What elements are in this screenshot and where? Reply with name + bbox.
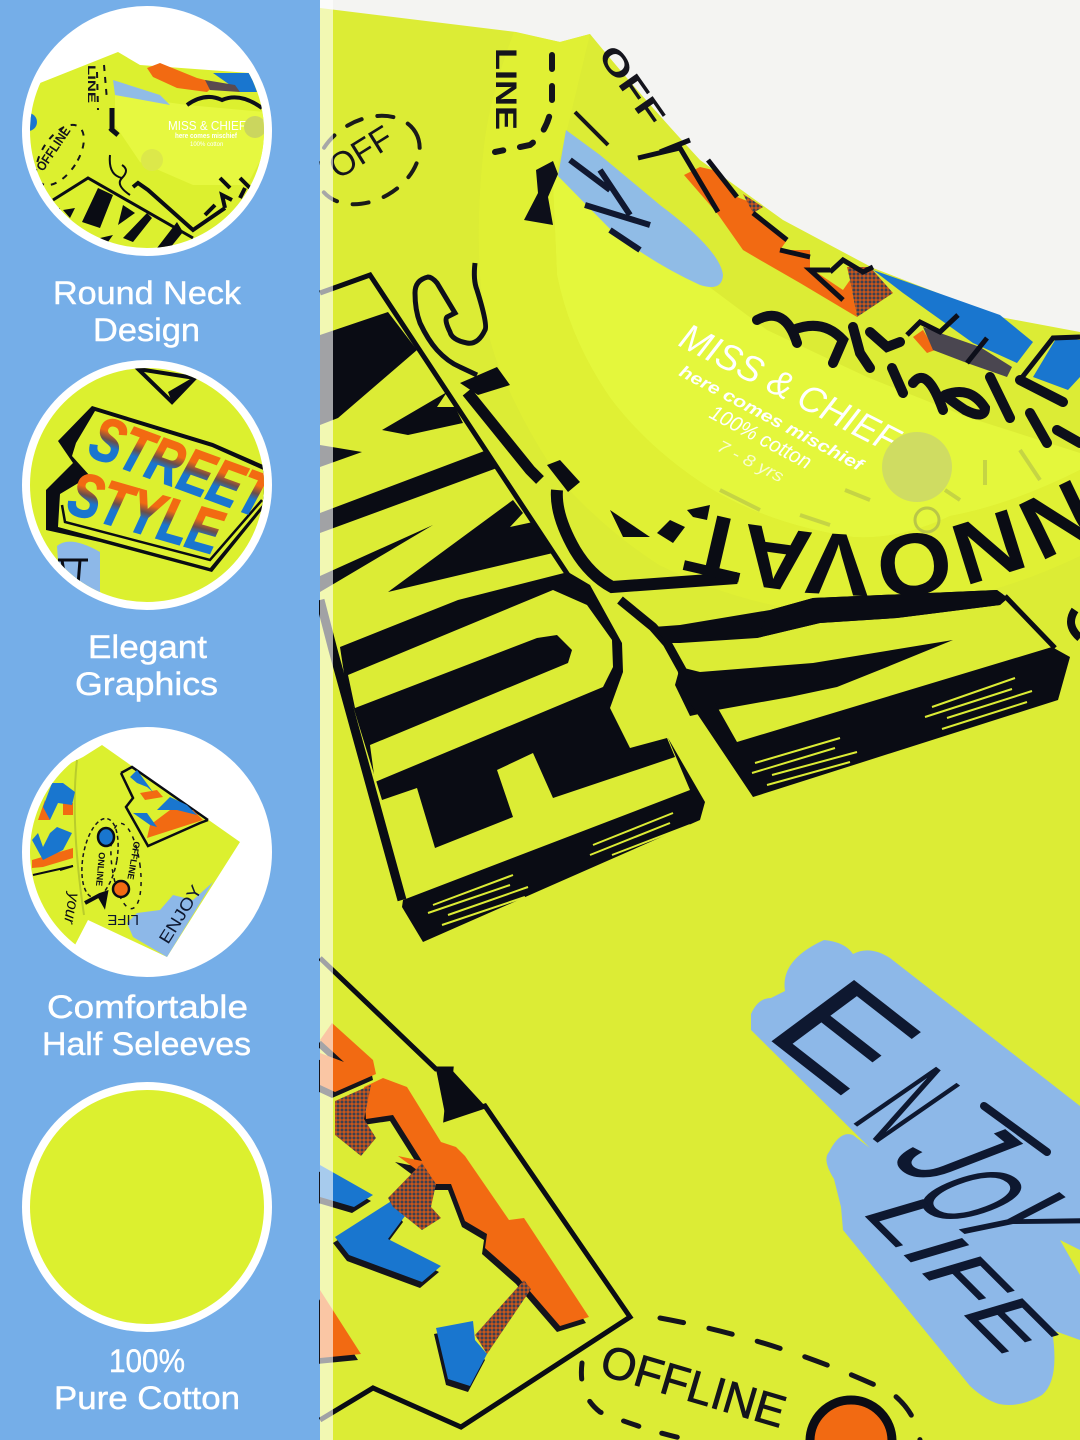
label: Round Neck Design: Round Neck [53, 275, 242, 311]
feature 1: round neck: LINE [85, 65, 97, 103]
show-through circle on inner neck [720, 432, 1040, 532]
inner neck label: brand text: MISS & CHIEF [673, 316, 908, 462]
OFFLINE tag [581, 1318, 920, 1440]
ENJOY LIFE paint blob: E [735, 953, 954, 1119]
ENJOY LIFE paint blob: O [880, 1152, 1063, 1239]
ENJOY LIFE paint blob [735, 940, 1080, 1405]
shirt body [320, 8, 1080, 1440]
shadows [317, 1029, 586, 1364]
back collar print [558, 130, 1080, 443]
ENJOY LIFE paint blob: N [824, 1046, 989, 1164]
collar print: LINE and OFF: OFF [591, 38, 672, 133]
collar print: LINE and OFF: LINE [489, 48, 522, 130]
feature 4: pure cotton swatch [22, 1082, 272, 1332]
feature 3: half sleeves [15, 727, 272, 977]
FUNK block print [320, 275, 705, 942]
OFFLINE tag: OFFLINE [595, 1335, 792, 1438]
label: Round Neck Design: Design [93, 312, 200, 348]
left feature column [0, 0, 319, 1440]
left street graphic [32, 800, 73, 868]
orange letters [320, 1023, 589, 1358]
label: Elegant Graphics [75, 629, 218, 702]
label: 100% Pure Cotton: 100% [109, 1343, 185, 1379]
label: Elegant Graphics: Elegant [88, 629, 207, 665]
feature 3: half sleeves: your [60, 890, 82, 926]
arrow [85, 893, 106, 904]
feature 1: round neck: here comes mischief [175, 133, 238, 140]
online and offline tags [81, 818, 119, 898]
top-left dashed tag: OFF [300, 98, 436, 222]
feature 1: round neck: 100% cotton [190, 142, 223, 148]
faded left strip of photo [320, 0, 333, 1440]
label: Elegant Graphics: Graphics [75, 666, 218, 702]
curl line by the collar [415, 263, 486, 375]
halftone fades [335, 1085, 531, 1354]
inner neck label: brand text: 100% cotton [706, 401, 815, 474]
overlap of MW band on collar text [757, 590, 1008, 638]
feature 2: elegant graphics: STYLE [61, 459, 230, 569]
top-left dashed tag: OFF: OFF [322, 119, 400, 187]
collar band [479, 32, 1080, 613]
feature 1: round neck [19, 6, 280, 260]
collar front lines [460, 367, 1080, 638]
U yellow letter band [348, 590, 613, 782]
label: Comfortable Half Seleeves: Half Seleeves [42, 1026, 251, 1062]
label: Comfortable Half Seleeves [42, 989, 251, 1062]
neck interior [553, 174, 1080, 537]
feature 2: elegant graphics: STREET [81, 403, 283, 533]
label: 100% Pure Cotton [54, 1343, 240, 1416]
ENJOY LIFE paint blob: LIFE [842, 1189, 1080, 1361]
feature 3: half sleeves: ENJOY [155, 882, 206, 947]
MW block print [620, 590, 1070, 797]
inner neck label: brand text: here comes mischief [676, 362, 869, 476]
feature 1: round neck: MISS & CHIEF [168, 118, 246, 133]
feature 3: half sleeves: ONLINE [94, 852, 107, 887]
feature 3: half sleeves: LIFE [107, 911, 139, 928]
blue letters [320, 1165, 487, 1386]
sleeve street graphic [121, 767, 208, 846]
feature 2: elegant graphics [20, 360, 283, 610]
3D side of block [402, 738, 705, 942]
U and F black mass [340, 572, 675, 848]
feature 3: half sleeves: OFFLINE [125, 841, 142, 880]
printed FUNK fragments [53, 178, 193, 238]
feature 1: round neck: OFFLINE [33, 124, 74, 174]
ENJOY LIFE paint blob: J [854, 1104, 1061, 1201]
label: Comfortable Half Seleeves: Comfortable [47, 989, 248, 1025]
label: 100% Pure Cotton: Pure Cotton [54, 1380, 240, 1416]
main photo: shirt close-up [319, 0, 1080, 1440]
label: Round Neck Design [53, 275, 242, 348]
collar print: LINE and OFF [489, 38, 672, 225]
street art frame, bottom left [317, 958, 630, 1427]
inner neck label: brand text: 7 - 8 yrs [714, 437, 787, 487]
